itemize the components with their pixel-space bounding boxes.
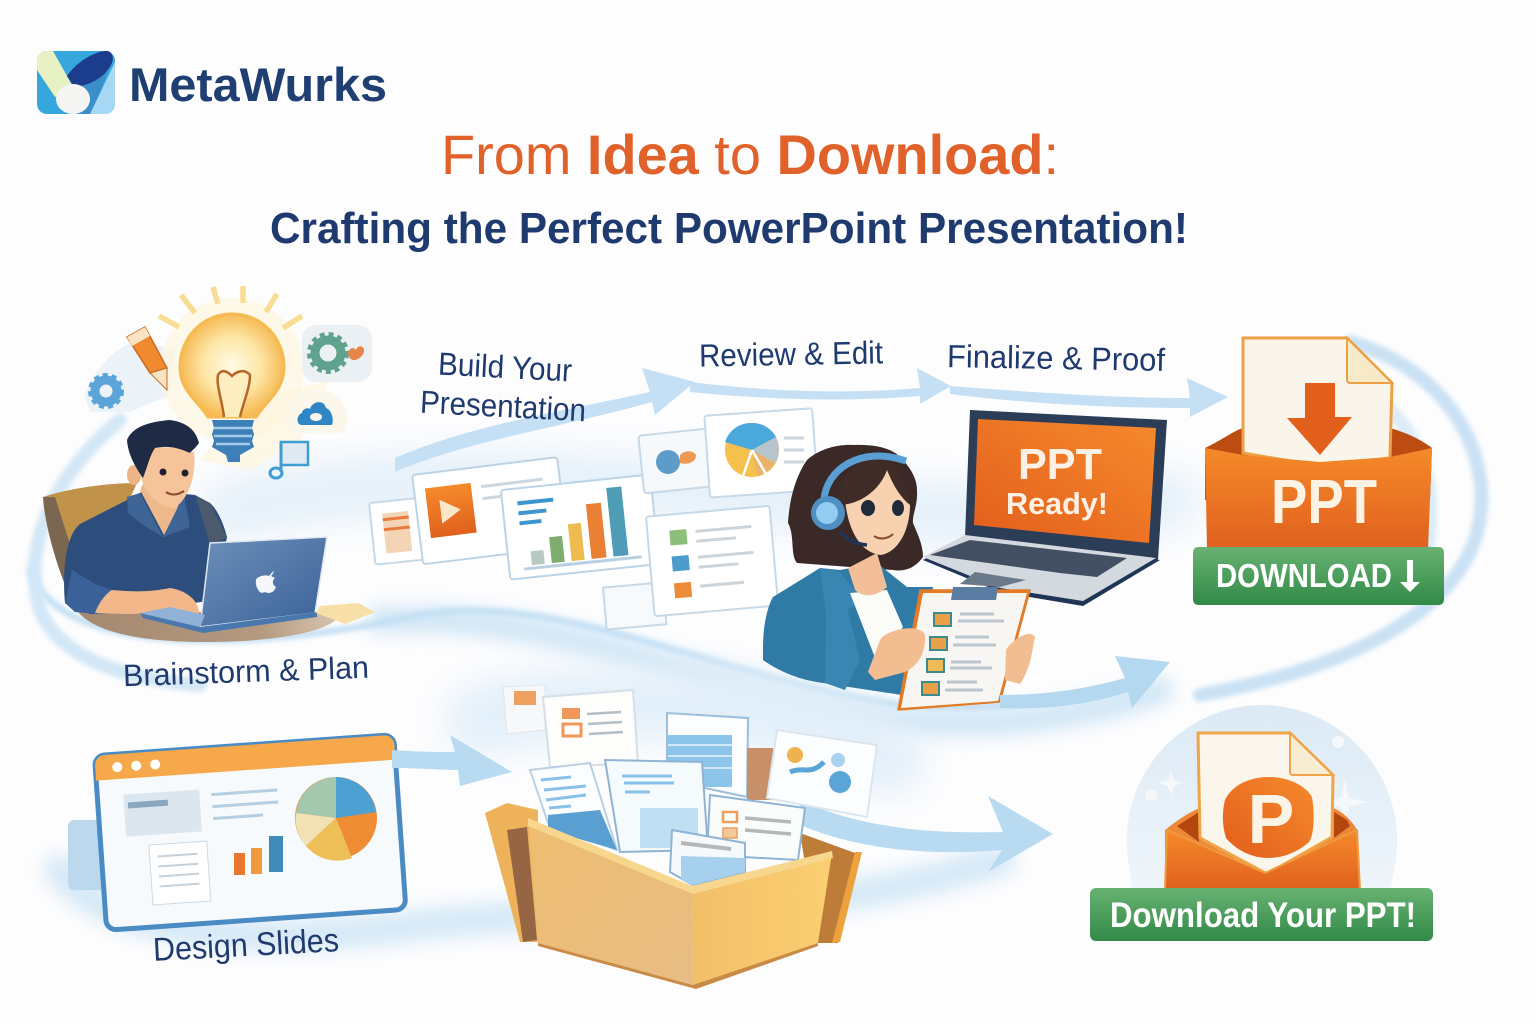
ppt download folder — [1193, 338, 1444, 605]
shirt — [64, 490, 227, 614]
laptop: ppt ready — [923, 410, 1167, 606]
arrow: to folder — [392, 735, 512, 786]
download button — [1193, 547, 1444, 605]
powerpoint p badge — [1223, 777, 1314, 858]
label: build — [419, 346, 587, 428]
background flowing swooshes — [30, 342, 1481, 936]
checklist slide — [597, 506, 779, 629]
pale icon bubble — [84, 340, 175, 412]
laptop — [140, 537, 327, 633]
slide cluster — [369, 408, 818, 629]
powerpoint p badge: P — [1248, 780, 1294, 858]
folder front panels — [528, 820, 693, 985]
music note icon — [270, 442, 308, 478]
title — [270, 123, 1188, 253]
jacket — [763, 563, 933, 697]
logo wordmark: MetaWurks — [129, 58, 387, 111]
pie slide — [638, 408, 818, 498]
back slides — [503, 685, 877, 817]
video slide — [412, 457, 568, 564]
label: finalize: Finalize & Proof — [947, 338, 1165, 378]
laptop: ppt ready: PPT — [1018, 440, 1102, 489]
subtitle: Crafting the Perfect PowerPoint Presentation! — [270, 204, 1188, 253]
chart slide — [501, 474, 660, 580]
face — [845, 465, 910, 555]
notepad — [316, 603, 375, 624]
gear icons — [90, 325, 372, 407]
desk — [78, 612, 340, 642]
label: build: Build Your — [437, 346, 573, 388]
title: From Idea to Download: — [441, 123, 1059, 186]
step: design slides — [68, 735, 406, 968]
download your ppt button — [1090, 888, 1433, 941]
blouse and neck — [850, 590, 903, 663]
arrow: to final download — [800, 796, 1053, 872]
step: brainstorm and plan — [43, 286, 375, 693]
folder with slides — [485, 685, 877, 989]
forearm — [95, 588, 199, 618]
arrow: to finalize — [690, 368, 951, 404]
folder back flaps — [485, 803, 538, 942]
arrow: lower swoosh — [1000, 656, 1170, 708]
arrow: to ppt — [950, 378, 1228, 417]
clipboard checklist — [898, 572, 1030, 710]
small slide left — [369, 497, 435, 565]
keyboard base — [923, 537, 1160, 606]
label: review: Review & Edit — [699, 334, 883, 374]
bar chart — [234, 836, 283, 875]
cloud icon — [285, 390, 347, 433]
lightbulb icon — [159, 286, 330, 470]
front slides — [530, 763, 617, 850]
ppt download folder: PPT — [1271, 468, 1377, 537]
download button: DOWNLOAD — [1216, 557, 1392, 594]
label: Brainstorm & Plan — [122, 650, 370, 693]
chair — [43, 483, 137, 590]
hands — [868, 628, 925, 680]
download your ppt button: Download Your PPT! — [1110, 896, 1416, 935]
hair — [127, 420, 199, 478]
headset — [824, 456, 906, 500]
laptop: ppt ready: Ready! — [1006, 486, 1108, 521]
logo — [37, 51, 387, 114]
man — [64, 420, 327, 633]
neck and face — [140, 470, 182, 537]
final ppt envelope — [1090, 705, 1433, 941]
pencil icon — [127, 327, 167, 390]
label: Design Slides — [152, 921, 340, 968]
label: build: Presentation — [419, 384, 587, 428]
hair — [788, 445, 923, 570]
woman with clipboard — [763, 445, 1035, 710]
arrow: to review — [395, 368, 695, 472]
pie chart — [295, 777, 377, 861]
